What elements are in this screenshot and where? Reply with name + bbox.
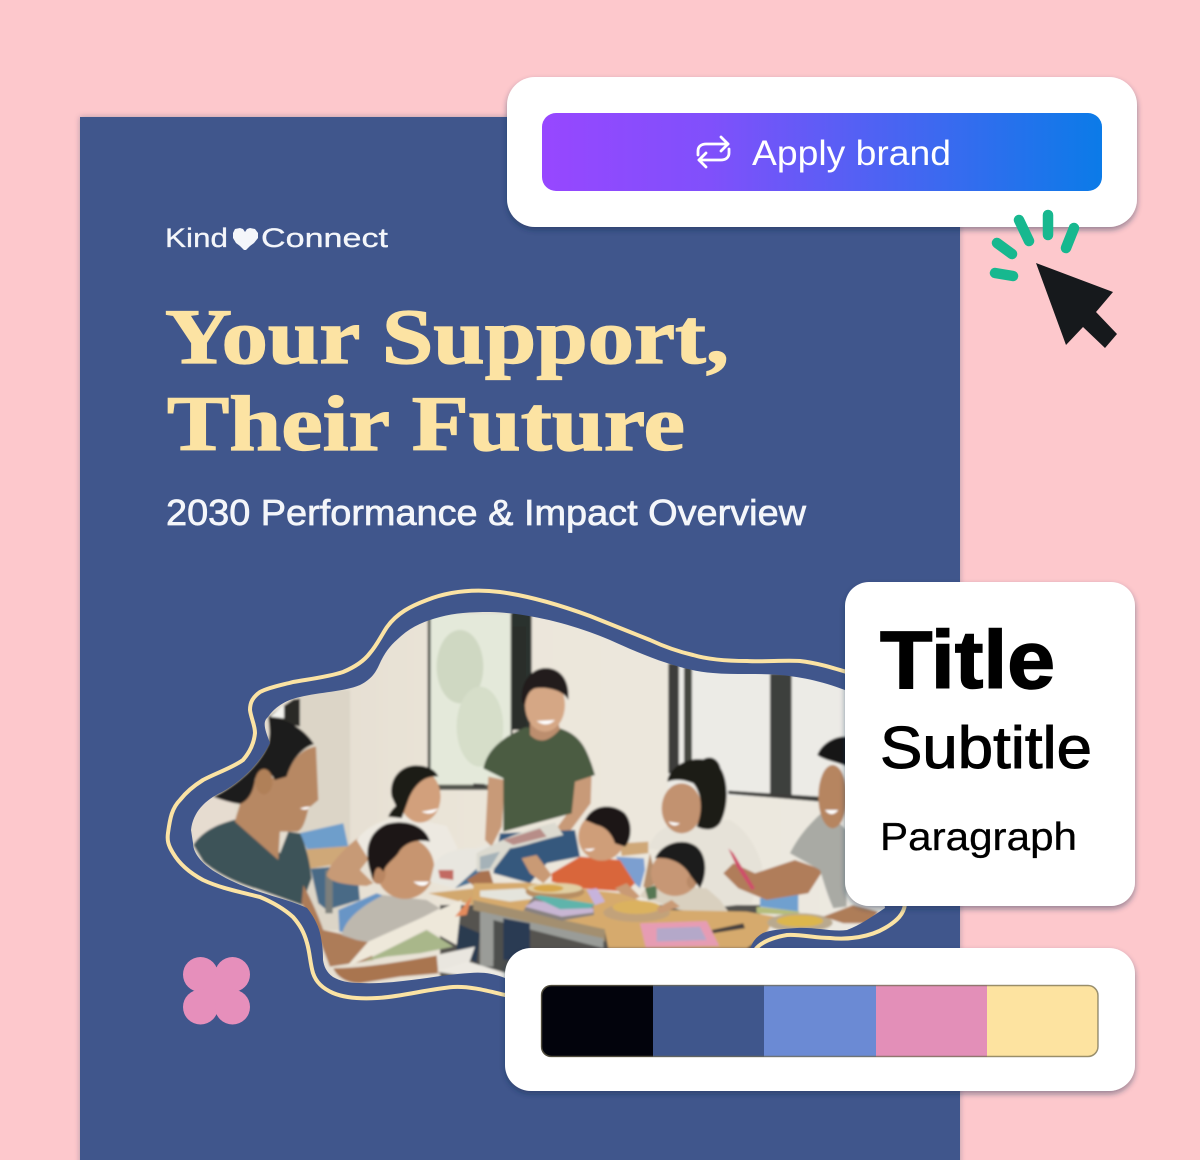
orange shirt boy: [522, 855, 552, 883]
table: [473, 883, 775, 948]
man: [723, 860, 823, 900]
photo left half: [190, 610, 532, 983]
button label: Apply brand: [752, 133, 951, 173]
icon: click burst ticks: [995, 215, 1074, 276]
decorative gold outline around photo: [168, 591, 905, 998]
woman right: [723, 904, 735, 908]
teacher: [485, 777, 505, 847]
open book right: [428, 866, 438, 883]
sample paragraph: Paragraph: [880, 816, 1077, 859]
sample title: Title: [880, 615, 1055, 706]
big book and lower arm: [333, 955, 440, 983]
desk behind and chairs: [620, 842, 648, 856]
title: [165, 293, 729, 467]
magazine: [477, 823, 563, 872]
icon: pink flower: [183, 957, 250, 1024]
plates: [524, 889, 584, 900]
logo: KindConnect: [165, 223, 389, 253]
subtitle: 2030 Performance & Impact Overview: [166, 492, 807, 533]
panel: brochure page: [80, 117, 960, 1160]
panel: typography card: [845, 582, 1135, 906]
table and legs right: [480, 908, 523, 973]
boy: [338, 893, 387, 933]
girl: [327, 837, 373, 886]
sample subtitle: Subtitle: [880, 715, 1092, 781]
logo: KindConnect: Connect: [261, 223, 389, 253]
woman left: [193, 819, 312, 905]
title: Your Support,: [165, 293, 729, 380]
logo: KindConnect: Kind: [165, 223, 228, 253]
icon: repeat arrows: [698, 137, 729, 167]
photo right half: [472, 663, 879, 960]
colour swatches: [541, 985, 1098, 1057]
icon: cursor arrow: [1036, 263, 1117, 348]
panel: colour palette card: [505, 948, 1135, 1091]
title: Their Future: [167, 380, 685, 467]
panel: apply brand card: [507, 77, 1137, 227]
photo: family and children at a classroom table: [191, 612, 885, 984]
button: apply brand: [542, 113, 1102, 191]
toddler: [640, 885, 728, 916]
